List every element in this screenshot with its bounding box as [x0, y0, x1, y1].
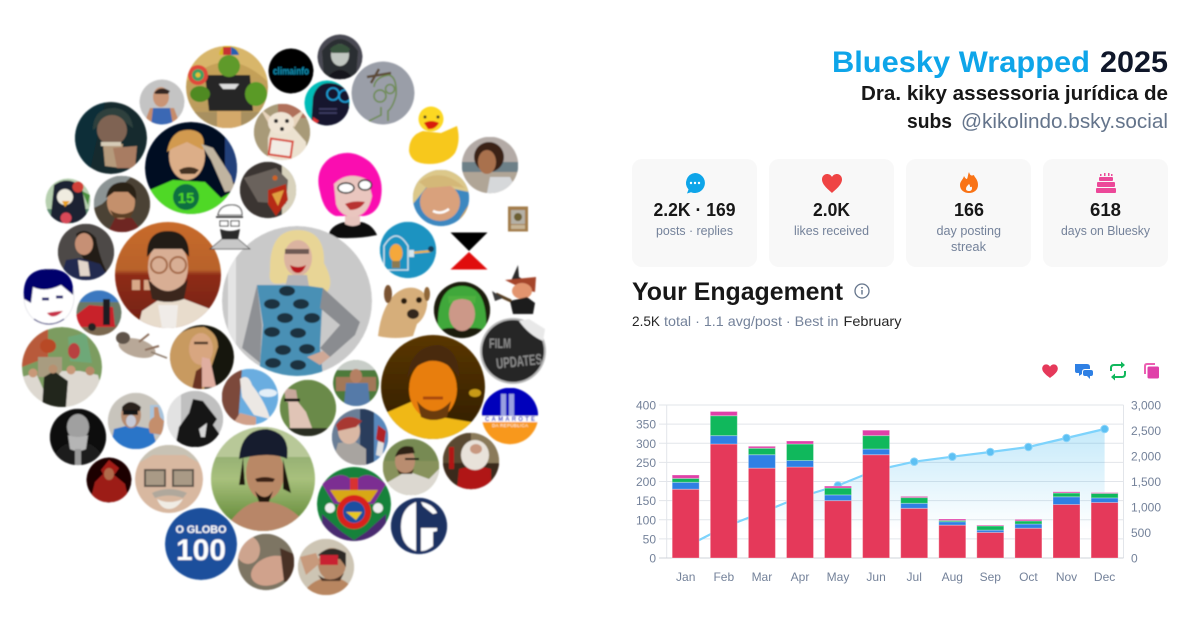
avatar: man with round glasses	[115, 222, 221, 328]
avatar: woman with white dove	[222, 369, 278, 425]
avatar: man with glasses in white shirt	[383, 439, 439, 495]
chart: right axis labels: 0	[1131, 552, 1138, 566]
avatar: red vintage car	[76, 290, 122, 337]
avatar: Film Updates sticker: UPDATES	[495, 351, 543, 373]
chart: right axis labels: 3,000	[1131, 398, 1161, 412]
chart: right axis labels: 2,000	[1131, 450, 1161, 464]
avatar: man in orange light	[381, 335, 485, 447]
avatar: man in green superhero suit: 15	[178, 190, 194, 207]
avatar: group painting mural	[22, 327, 102, 407]
chart: month labels: Sep	[980, 570, 1001, 584]
avatar: Camarote da República logo: CAMAROTE	[485, 417, 535, 423]
avatar: O Globo 100 logo: 100	[176, 534, 226, 567]
engagement summary line: total · 1.1 avg/post · Best in	[664, 313, 838, 329]
icon: replies bubbles	[1075, 364, 1093, 379]
avatar: climainfo logo: climainfo	[273, 66, 309, 78]
display name and handle: Dra. kiky assessoria jurídica de	[861, 83, 1168, 105]
icon: info	[855, 284, 869, 298]
panel: posts and replies: 2.2K · 169	[654, 200, 736, 220]
chart: left axis labels: 200	[636, 475, 656, 489]
icon: quotes overlapping squares	[1145, 364, 1159, 378]
chart: month labels: Aug	[942, 570, 963, 584]
avatar: man in green superhero suit	[145, 122, 239, 214]
avatar: woman with dark hair	[58, 224, 114, 280]
avatar: witch character	[492, 265, 536, 314]
avatar: close-up of faces	[236, 534, 296, 591]
chart: month labels	[676, 570, 1115, 584]
icon: reposts arrows	[1111, 362, 1125, 380]
engagement summary line: February	[844, 313, 902, 329]
chart: bars	[672, 412, 1118, 558]
chart: month labels: May	[827, 570, 849, 584]
title: Bluesky Wrapped 2025: Bluesky Wrapped	[832, 46, 1090, 79]
icon: birthday cake	[1096, 173, 1116, 193]
panel: days on Bluesky: days on Bluesky	[1061, 223, 1150, 238]
avatar: man holding coffee mug	[75, 102, 147, 174]
panel: day posting streak: day posting	[936, 223, 1001, 238]
avatar: Film Updates sticker: FILM	[489, 335, 511, 351]
chart: right axis labels: 500	[1131, 526, 1151, 540]
avatar: older man with glasses and moustache	[135, 445, 203, 513]
chart: right axis labels: 1,500	[1131, 475, 1161, 489]
panel: day posting streak: streak	[951, 239, 986, 254]
avatar: red cardinal painting	[86, 458, 132, 502]
chart: cumulative line	[686, 429, 1105, 547]
chart: month labels: Jun	[866, 570, 886, 584]
avatar: darth vader with glasses	[304, 80, 351, 126]
avatar: penguin with flowers	[45, 178, 91, 225]
panel: posts and replies: posts · replies	[656, 223, 733, 238]
chart: left axis labels	[636, 398, 656, 566]
chart: monthly engagement stacked bars with cumulative line	[636, 398, 1161, 584]
avatar bubble cluster	[22, 34, 546, 595]
chart: left axis labels: 0	[649, 552, 656, 566]
chart: left axis labels: 100	[636, 513, 656, 527]
chart: month labels: Oct	[1019, 570, 1038, 584]
avatar: cartoon boy with blue hair	[24, 269, 74, 325]
chart: left axis labels: 50	[643, 532, 656, 546]
avatar: curly hair man at sunset	[462, 137, 518, 194]
chart: month labels: Feb	[713, 570, 734, 584]
chart: cumulative line points	[834, 425, 1108, 489]
avatar: bearded man black and white	[50, 409, 106, 465]
avatar: sketch of bearded man in a cap	[210, 205, 250, 249]
avatar: The Guardian G logo	[391, 498, 447, 554]
display name and handle: @kikolindo.bsky.social	[961, 111, 1168, 133]
avatar: man with sunglasses and thumbs up	[108, 393, 164, 449]
avatar: hairless cat on green background	[280, 380, 336, 436]
avatar: painted boy with red cap	[332, 409, 388, 465]
avatar: black and white silhouette	[167, 391, 223, 447]
avatar: leaping rat	[116, 332, 167, 362]
chart gridlines	[659, 405, 1124, 558]
legend: engagement types	[1042, 362, 1159, 380]
avatar: snarling beast	[240, 162, 296, 218]
icon: heart	[822, 174, 842, 193]
avatar: Camarote da República logo	[482, 388, 538, 446]
avatar: green wig woman	[434, 282, 490, 338]
avatar: Film Updates sticker	[480, 318, 546, 384]
engagement summary line: 2.5K	[632, 313, 661, 329]
avatar: black and red hourglass	[450, 232, 488, 270]
avatar: man in blue tank top on grey	[140, 80, 184, 125]
panel: day posting streak	[906, 159, 1031, 267]
chart: month labels: Jul	[907, 570, 922, 584]
avatar: birdcage with light bulb	[380, 222, 436, 278]
avatar: pink haired cartoon woman	[318, 153, 382, 238]
avatar: main profile drag queen with blonde hair	[222, 226, 372, 376]
panel: likes received: likes received	[794, 223, 869, 238]
avatar: man with cap in a park	[211, 427, 315, 531]
chart: left axis labels: 350	[636, 418, 656, 432]
avatar: blond smiling man	[413, 170, 469, 226]
avatar: scruffy man in a car	[94, 176, 150, 232]
avatar: muscular man in blue tank top	[333, 360, 379, 406]
panel: days on Bluesky: 618	[1090, 200, 1121, 220]
display name and handle	[861, 83, 1168, 133]
chart: left axis labels: 150	[636, 494, 656, 508]
chart: month labels: Jan	[676, 570, 695, 584]
display name and handle: subs	[907, 111, 952, 133]
chart: month labels: Mar	[752, 570, 772, 584]
chart: cumulative area	[686, 429, 1105, 558]
chart: month labels: Dec	[1094, 570, 1115, 584]
panel: likes received	[769, 159, 894, 267]
chart: left axis labels: 300	[636, 437, 656, 451]
panel: likes received: 2.0K	[813, 200, 850, 220]
engagement summary line	[632, 313, 902, 329]
avatar: blonde woman praying	[170, 325, 234, 389]
avatar: O Globo 100 logo: O GLOBO	[176, 524, 227, 536]
icon: chat bubble	[686, 173, 705, 194]
chart: right axis labels: 2,500	[1131, 424, 1161, 438]
panel: posts and replies	[632, 159, 757, 267]
avatar: colourful carnival emblem	[317, 467, 391, 541]
chart: left axis labels: 400	[636, 398, 656, 412]
avatar: O Globo 100 logo	[165, 508, 237, 580]
chart: month labels: Apr	[791, 570, 809, 584]
chart: right axis labels	[1131, 398, 1161, 566]
avatar: goblin with lollipop	[186, 45, 268, 132]
heading: Your Engagement: Your Engagement	[632, 278, 844, 306]
avatar: Camarote da República logo: DA REPÚBLICA	[492, 422, 528, 428]
panel: days on Bluesky	[1043, 159, 1168, 267]
title: Bluesky Wrapped 2025: 2025	[1100, 46, 1168, 79]
avatar: stick figure drawing	[352, 62, 414, 124]
icon: likes heart	[1042, 364, 1058, 378]
avatar: climainfo logo	[268, 48, 314, 94]
panel: day posting streak: 166	[954, 200, 984, 220]
avatar: yugioh card	[508, 206, 528, 232]
chart: right axis labels: 1,000	[1131, 500, 1161, 514]
icon: flame	[960, 172, 978, 193]
avatar: shirtless man with red card	[298, 539, 354, 595]
avatar: yellow rubber duck	[409, 106, 459, 164]
chart: month labels: Nov	[1056, 570, 1077, 584]
avatar: caramel dog	[378, 285, 430, 338]
chart: left axis labels: 250	[636, 456, 656, 470]
avatar: anime girl	[318, 34, 362, 80]
avatar: chihuahua with name tag	[254, 104, 310, 160]
avatar: Santa Claus	[443, 433, 499, 491]
